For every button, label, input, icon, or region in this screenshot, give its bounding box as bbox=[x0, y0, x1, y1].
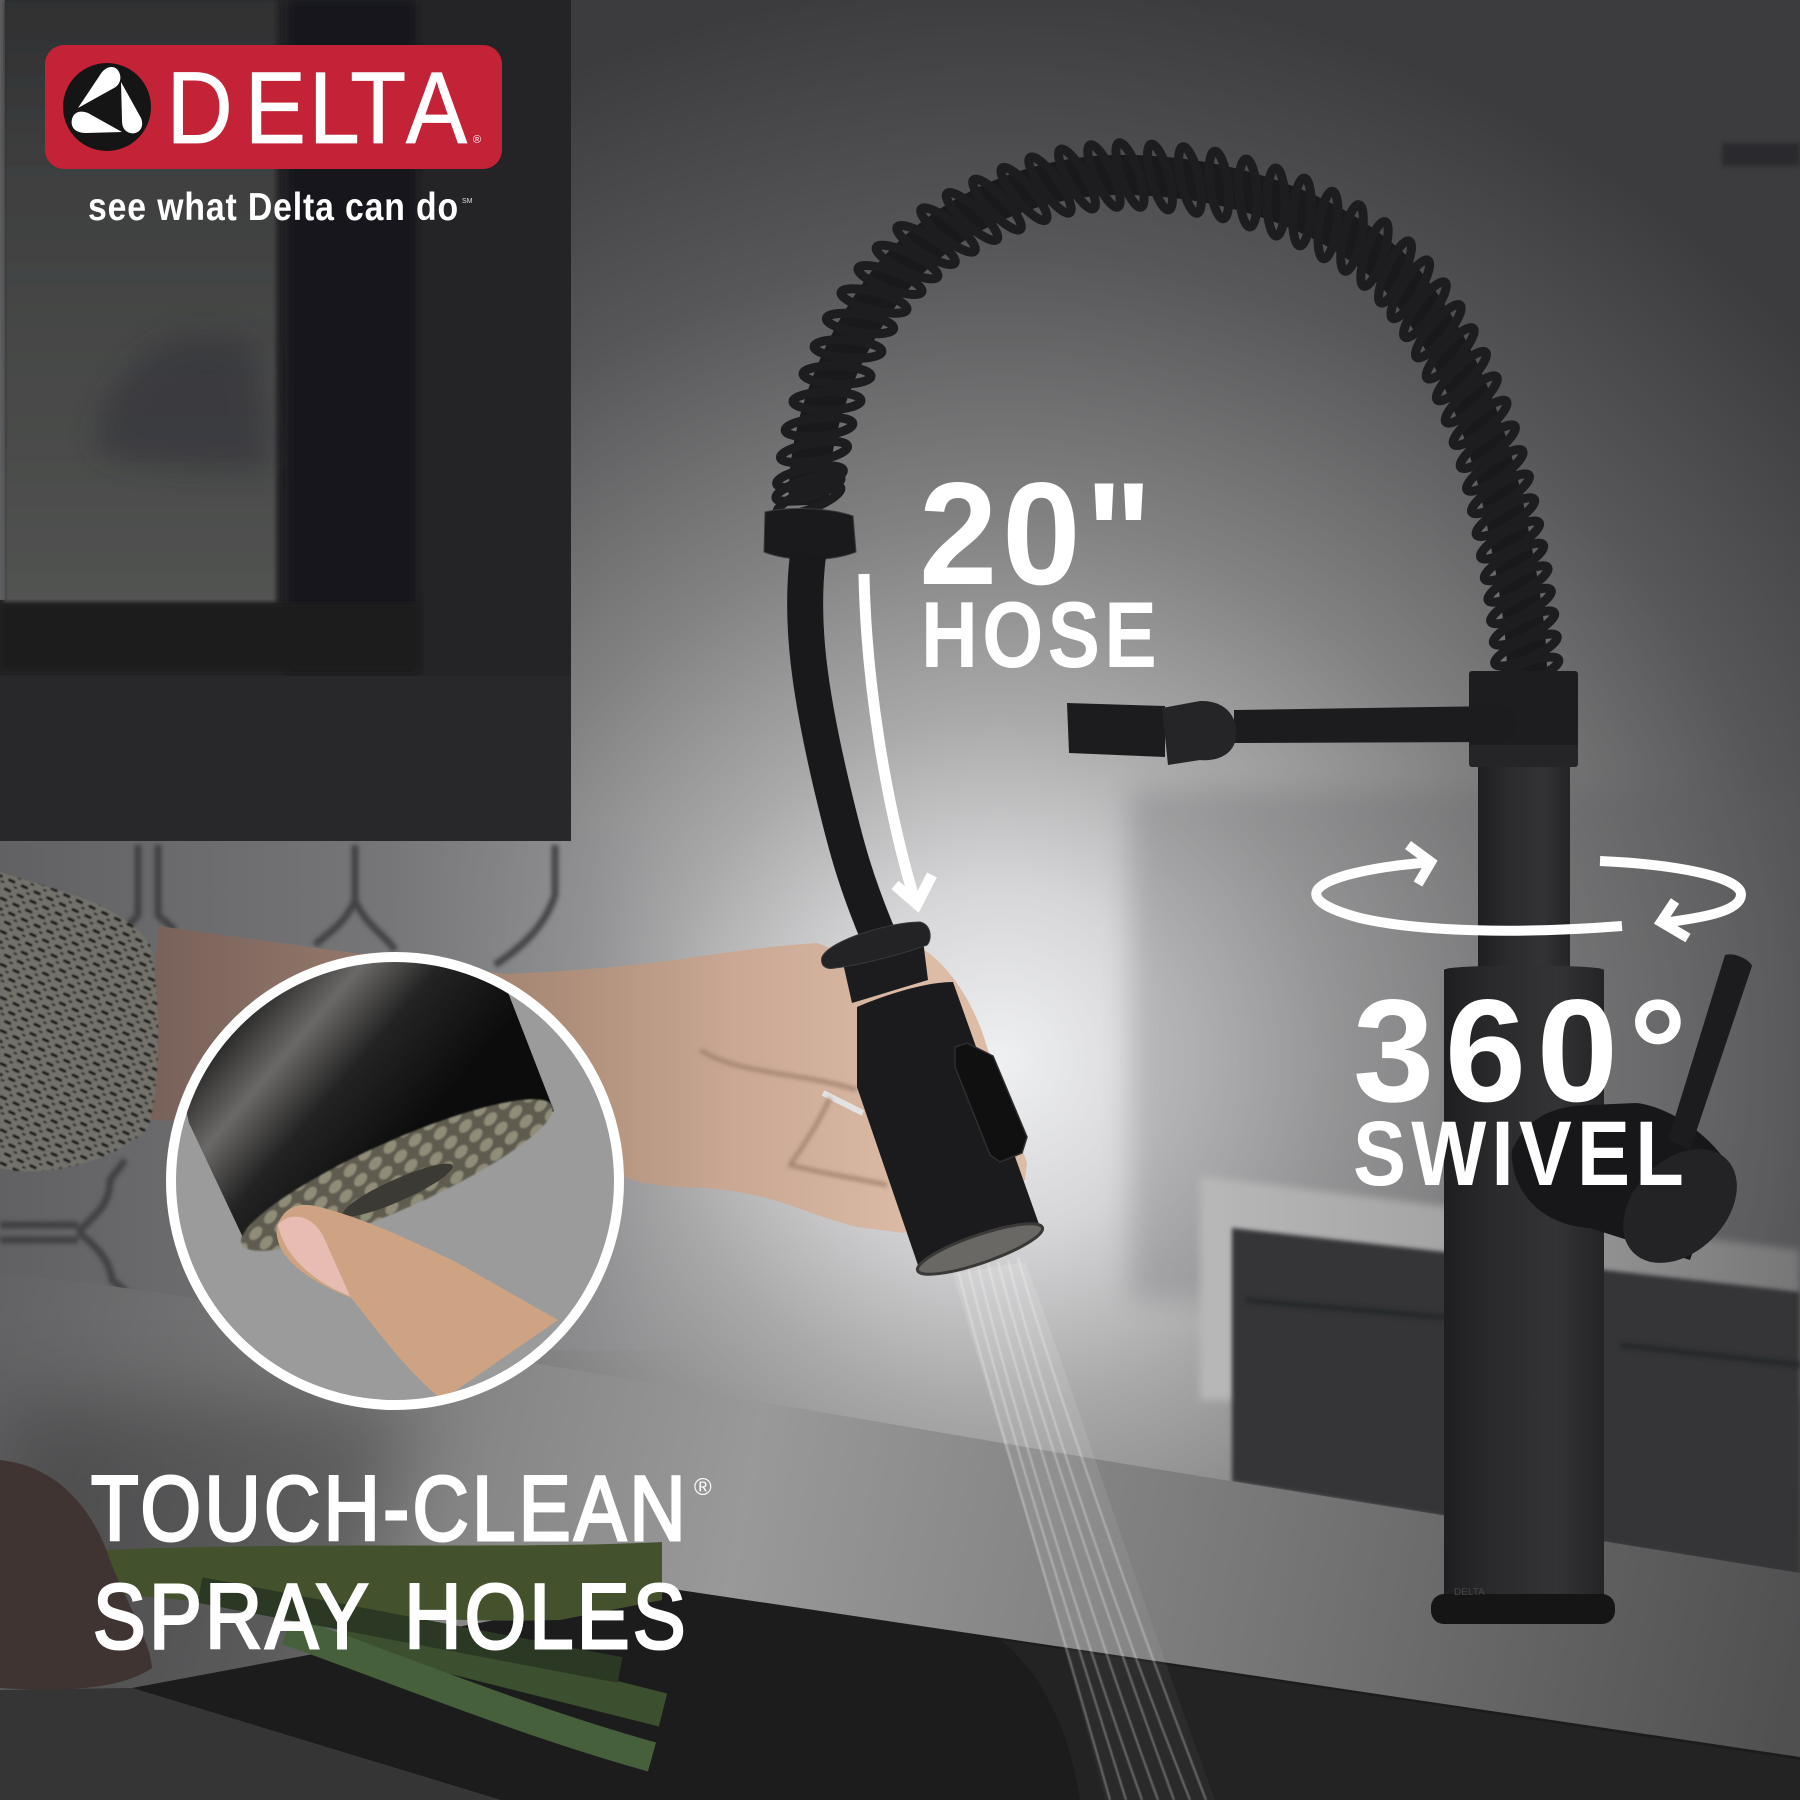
main counter bbox=[0, 1274, 1800, 1800]
lever handle bbox=[1512, 954, 1759, 1285]
faucet base tube bbox=[1444, 966, 1604, 1600]
embossed brand mark: DELTA bbox=[1454, 1587, 1485, 1598]
wall bbox=[454, 120, 1800, 1516]
red badge bbox=[45, 45, 502, 169]
sprayer flange bbox=[822, 922, 930, 968]
spray head bbox=[186, 962, 554, 1237]
brand logo bbox=[45, 45, 502, 229]
hose arrow bbox=[864, 574, 932, 904]
main column bbox=[1478, 760, 1570, 970]
faucet bbox=[764, 175, 1759, 1624]
callout: 360 degree swivel bbox=[1316, 845, 1741, 1205]
window and dark frame bbox=[0, 0, 571, 841]
base foot bbox=[1431, 1594, 1615, 1624]
sleeve bbox=[0, 872, 158, 1171]
far counter bbox=[1200, 1176, 1800, 1400]
callout: touch-clean spray holes bbox=[91, 1458, 712, 1668]
callout: 20 inch hose bbox=[864, 452, 1161, 904]
finger bbox=[277, 1205, 558, 1400]
SPRAY HOLES label: SPRAY HOLES bbox=[93, 1566, 689, 1668]
tiled backsplash bbox=[0, 841, 562, 1300]
HOSE label: HOSE bbox=[921, 582, 1161, 687]
hose holder arm bbox=[1067, 701, 1517, 765]
registered mark: ® bbox=[694, 1474, 712, 1501]
white gap between fingers bbox=[823, 1093, 863, 1113]
DELTA wordmark: DELTA bbox=[167, 50, 467, 165]
finger creases bbox=[700, 1050, 887, 1185]
sink bbox=[132, 1588, 1800, 1800]
sprayer neck bbox=[843, 940, 928, 1003]
20" label: 20" bbox=[919, 452, 1157, 615]
bottom counter front bbox=[0, 1688, 500, 1800]
green onions bbox=[60, 1542, 663, 1757]
sprayer body bbox=[857, 982, 1040, 1271]
TOUCH-CLEAN label: TOUCH-CLEAN bbox=[91, 1458, 689, 1560]
registered mark: ® bbox=[473, 134, 481, 146]
service mark: SM bbox=[462, 198, 473, 205]
spray button bbox=[955, 1043, 1027, 1162]
pull-down hose bbox=[805, 555, 878, 935]
spray face bbox=[240, 1098, 554, 1252]
spray face bbox=[913, 1214, 1047, 1284]
SWIVEL label: SWIVEL bbox=[1353, 1103, 1689, 1205]
dark shading lower left bbox=[0, 1376, 428, 1714]
dark cabinets bbox=[1232, 1228, 1800, 1575]
right wall plane bbox=[1120, 784, 1595, 1306]
swivel arrows bbox=[1316, 845, 1741, 938]
tagline: see what Delta can do bbox=[88, 186, 459, 229]
inset: touch-clean spray head close-up bbox=[150, 940, 619, 1405]
hose collar bbox=[764, 509, 856, 560]
spring spout bbox=[808, 175, 1527, 680]
nail bbox=[278, 1217, 350, 1296]
spring mount bbox=[1469, 671, 1578, 767]
360 degree label: 360° bbox=[1353, 969, 1687, 1132]
forearm and hand bbox=[147, 926, 1027, 1233]
top right shelf edge bbox=[1722, 143, 1800, 166]
left hand holding onions bbox=[0, 1460, 152, 1690]
thumbnail bbox=[860, 1038, 917, 1082]
icon: delta triangle mark bbox=[63, 63, 151, 151]
water spray bbox=[953, 1258, 1215, 1800]
